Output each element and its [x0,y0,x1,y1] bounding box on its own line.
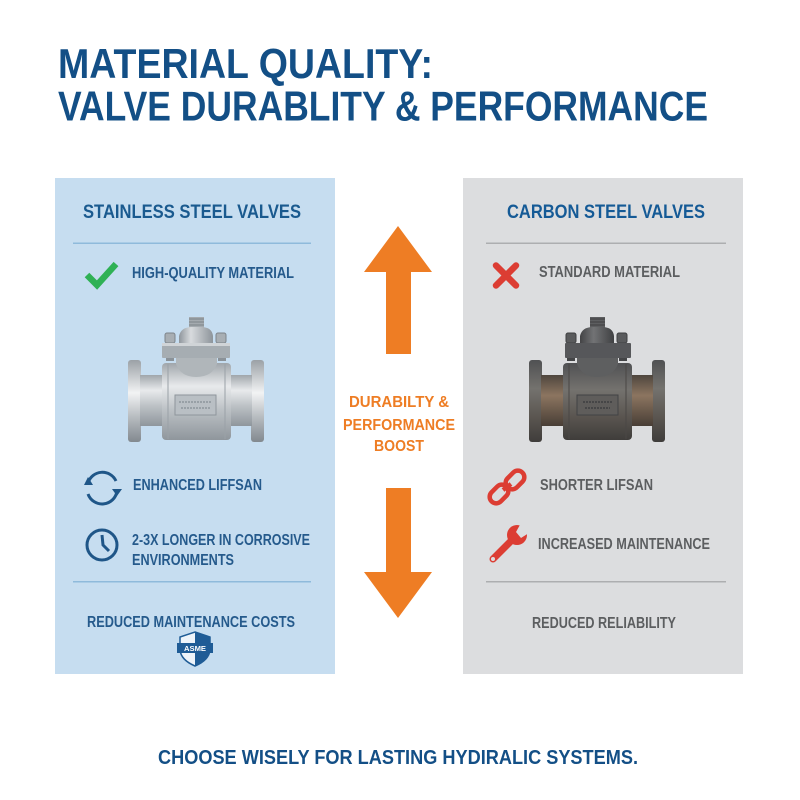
image: carbon steel valve [529,317,665,442]
text: reduced reliability: REDUCED RELIABILITY [532,615,676,632]
panel: stainless steel valves [55,178,335,674]
text: durability and performance boost: BOOST [374,438,424,455]
text: standard material: STANDARD MATERIAL [539,264,680,281]
text: longer in corrosive environments [132,532,310,569]
text: shorter lifespan: SHORTER LIFSAN [540,477,653,494]
title [58,40,708,130]
icon: ASME shield [177,632,213,666]
panel heading: stainless steel valves: STAINLESS STEEL VALVES [83,202,301,223]
image: stainless steel valve [128,317,264,442]
title: MATERIAL QUALITY: [58,40,433,87]
panel: carbon steel valves [463,178,743,674]
text: increased maintenance: INCREASED MAINTENANCE [538,536,710,553]
icon: clock [87,530,117,560]
icon: ASME shield: ASME [184,644,206,653]
arrow: up [364,226,432,354]
icon: red cross [496,266,516,286]
icon: refresh arrows [84,472,122,504]
text: enhanced lifespan: ENHANCED LIFFSAN [133,477,262,494]
text: durability and performance boost: PERFORMANCE [343,417,455,434]
text: longer in corrosive environments: ENVIRONMENTS [132,552,234,569]
text: durability and performance boost [343,394,455,455]
icon: wrench [491,523,532,561]
panel heading: carbon steel valves: CARBON STEEL VALVES [507,202,705,223]
text: durability and performance boost: DURABILTY & [349,394,449,411]
arrow: down [364,488,432,618]
icon: green check mark [87,264,116,285]
text: high-quality material: HIGH-QUALITY MATERIAL [132,265,294,282]
text: reduced maintenance costs: REDUCED MAINTENANCE COSTS [87,614,295,631]
footer tagline: CHOOSE WISELY FOR LASTING HYDIRALIC SYSTEMS. [158,746,638,769]
icon: chain [487,468,527,506]
text: longer in corrosive environments: 2-3X LONGER IN CORROSIVE [132,532,310,549]
